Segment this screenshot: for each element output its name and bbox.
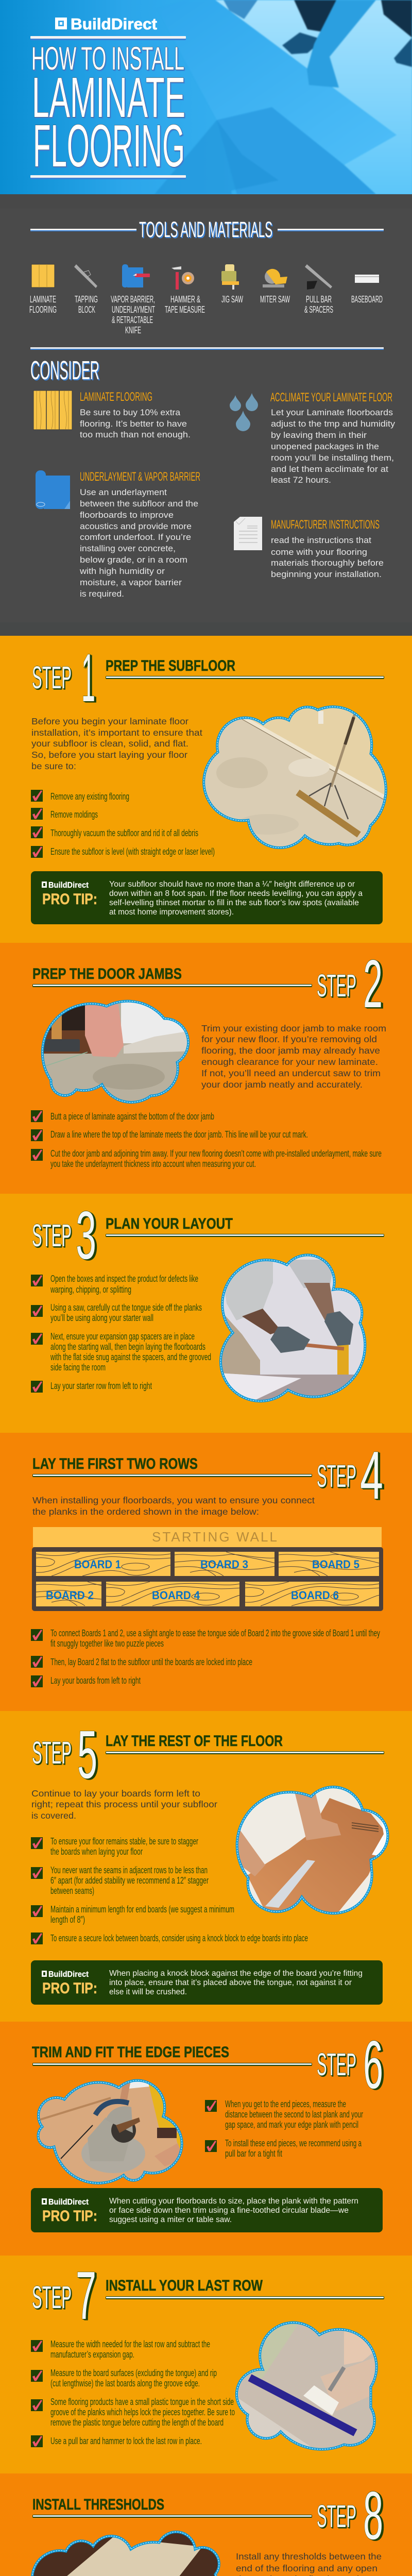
pro tip: knock block: PRO TIP:: [42, 1980, 97, 1997]
consider: underlayment and vapor barrier: installing over concrete,: [80, 544, 176, 553]
pro tip: cutting floorboards: [31, 2188, 383, 2232]
consider: laminate flooring: too much than not enough.: [80, 430, 191, 439]
step 6 badge: 6: [363, 2027, 383, 2103]
tool: tapping block: [74, 264, 98, 315]
consider: underlayment and vapor barrier: comfort underfoot. If you’re: [80, 532, 191, 542]
tool: miter saw: MITER SAW: [260, 294, 290, 304]
checklist: step 1: Ensure the subfloor is level (with straight edge or laser level): [50, 846, 215, 857]
step 3 heading: PLAN YOUR LAYOUT: [106, 1215, 233, 1232]
step 1 intro text: Before you begin your laminate floor: [31, 716, 188, 726]
tool: hammer and tape measure: TAPE MEASURE: [165, 304, 205, 315]
tool: vapor barrier, underlayment and knife: UNDERLAYMENT: [112, 304, 155, 315]
step 2 badge: STEP: [317, 968, 356, 1003]
tool: tapping block: BLOCK: [78, 304, 95, 315]
board 6: BOARD 6: [291, 1589, 339, 1602]
checklist: step 5: between seams): [50, 1886, 94, 1896]
step 2 intro text: flooring, the door jamb may already have: [201, 1045, 380, 1056]
checklist: step 3: Next, ensure your expansion gap spacers are in place: [50, 1331, 195, 1342]
step 4 heading: LAY THE FIRST TWO ROWS: [32, 1455, 198, 1472]
step 5 badge: [32, 1717, 97, 1792]
tool: baseboard: BASEBOARD: [351, 294, 383, 304]
step 3 badge: [32, 1197, 96, 1273]
checklist: step 4: Then, lay Board 2 flat to the subfloor until the boards are locked into place: [50, 1657, 252, 1667]
consider: acclimate your laminate floor: [230, 391, 396, 485]
step 5 intro text: [31, 1788, 217, 1821]
step 2 intro text: Trim your existing door jamb to make room: [201, 1023, 386, 1033]
starting wall: STARTING WALL: [152, 1529, 277, 1545]
panel: step 1: 1: [81, 640, 95, 716]
panel: step 6: [0, 2022, 412, 2256]
tool: jig saw: [221, 264, 243, 304]
heading: tools and materials: [30, 217, 384, 242]
step 8 badge: 8: [363, 2478, 383, 2553]
step 3 badge: STEP: [32, 1218, 72, 1253]
step 7 badge: [32, 2258, 96, 2333]
tool: vapor barrier, underlayment and knife: [111, 264, 155, 335]
panel: step 5: [0, 1711, 412, 2022]
step 4 intro text: the planks in the ordered shown in the image below:: [32, 1506, 259, 1517]
pro tip: subfloor height: [31, 871, 383, 924]
consider: acclimate your laminate floor: unopened packages in the: [271, 442, 379, 451]
panel: step 2: [0, 943, 412, 1194]
checklist: step 2: Butt a piece of laminate against the bottom of the door jamb: [50, 1111, 214, 1122]
step 1 intro text: [31, 716, 202, 771]
panel: step 1: [0, 636, 412, 943]
consider: acclimate your laminate floor: adjust to the tmp and humidity: [271, 419, 396, 429]
pro tip: cutting floorboards: suggest using a miter or table saw.: [109, 2215, 232, 2224]
step 5 heading: LAY THE REST OF THE FLOOR: [106, 1733, 283, 1750]
photo: sweeping the subfloor: [202, 705, 387, 849]
step 4 intro text: When installing your floorboards, you want to ensure you connect: [32, 1495, 315, 1505]
title: HOW TO INSTALL: [31, 41, 184, 77]
pro tip: knock block: else it will be crushed.: [109, 1988, 187, 1996]
tool: miter saw: [260, 269, 290, 304]
checklist: step 6: pull bar for a tight fit: [225, 2148, 282, 2159]
title: [31, 41, 185, 179]
tool: laminate flooring: [29, 264, 57, 315]
photo: threshold strip: [26, 2532, 227, 2576]
board 6: [245, 1582, 380, 1606]
pro tip: cutting floorboards: When cutting your floorboards to size, place the plank with the pattern: [109, 2197, 358, 2206]
consider: manufacturer instructions: materials thoroughly before: [271, 558, 384, 568]
step 2 intro text: enough clearance for your new laminate.: [201, 1057, 378, 1067]
step 3 badge: 3: [76, 1197, 96, 1273]
step 2 intro text: If not, you’ll need an undercut saw to trim: [201, 1068, 381, 1078]
step 4 badge: STEP: [317, 1459, 356, 1494]
checklist: step 4: [31, 1628, 380, 1687]
consider: underlayment and vapor barrier: with high humidity or: [79, 566, 165, 576]
consider: underlayment and vapor barrier: is required.: [80, 589, 124, 599]
diagram: board layout: [32, 1527, 383, 1611]
step 1 intro text: your subfloor is clean, solid, and flat.: [31, 738, 188, 749]
checklist: step 7: Measure to the board surfaces (excluding the tongue) and rip: [50, 2368, 217, 2378]
icon: water drops: [230, 393, 258, 431]
checklist: step 5: [31, 1836, 308, 1944]
step 5 intro text: Continue to lay your boards form left to: [31, 1788, 200, 1799]
checklist: step 5: Maintain a minimum length for end boards (we suggest a minimum: [50, 1904, 234, 1914]
board 4: BOARD 4: [152, 1589, 200, 1602]
checklist: step 6: [205, 2099, 363, 2159]
starting wall: [33, 1527, 382, 1547]
step 2 intro text: for your new floor. If you’re removing old: [201, 1034, 377, 1044]
checklist: step 1: [31, 790, 215, 858]
checklist: step 4: Lay your boards from left to right: [50, 1675, 141, 1686]
step 7 badge: STEP: [32, 2280, 72, 2315]
tool: vapor barrier, underlayment and knife: & RETRACTABLE: [112, 314, 153, 325]
tool: vapor barrier, underlayment and knife: KNIFE: [125, 325, 141, 335]
checklist: step 7: Use a pull bar and hammer to lock the last row in place.: [50, 2436, 202, 2446]
checklist: step 2: you take the underlayment thickness into account when measuring your cut.: [50, 1159, 256, 1169]
pro tip logo: BuildDirect: [48, 2198, 89, 2207]
board 2: [36, 1582, 136, 1606]
consider: laminate flooring: flooring. It’s better to have: [80, 419, 187, 429]
checklist: step 7: [31, 2339, 235, 2447]
board 5: BOARD 5: [312, 1558, 359, 1571]
step 1 heading: PREP THE SUBFLOOR: [106, 657, 235, 674]
checklist: step 7: Some flooring products have a small plastic tongue in the short side: [50, 2397, 234, 2407]
checklist: step 3: warping, chipping, or splitting: [50, 1284, 131, 1295]
checklist: step 6: When you get to the end pieces, measure the: [225, 2099, 346, 2109]
step 6 heading: TRIM AND FIT THE EDGE PIECES: [32, 2044, 229, 2061]
checklist: step 7: Measure the width needed for the last row and subtract the: [50, 2339, 210, 2349]
panel: step 4: [0, 1433, 412, 1711]
step 5 intro text: is covered.: [31, 1810, 76, 1821]
pro tip: subfloor height: Your subfloor should have no more than a ¼″ height difference up or: [109, 880, 355, 889]
icon: checklist document: [234, 517, 262, 550]
checklist: step 5: You never want the seams in adjacent rows to be less than: [50, 1865, 208, 1875]
photo: hammering with a pull bar: [235, 2321, 378, 2451]
step 6 badge: STEP: [317, 2047, 356, 2082]
consider: acclimate your laminate floor: least 72 hours.: [271, 475, 331, 485]
pro tip: knock block: When placing a knock block against the edge of the board you’re fitting: [109, 1969, 363, 1978]
logo: BuildDirect: [71, 15, 157, 33]
consider: manufacturer instructions: come with your flooring: [271, 547, 367, 557]
panel: step 8: [0, 2473, 412, 2576]
tool: tapping block: TAPPING: [75, 294, 98, 304]
consider: acclimate your laminate floor: Let your Laminate floorboards: [271, 408, 393, 417]
step 1 intro text: So, before you start laying your floor: [31, 750, 187, 760]
checklist: step 2: [31, 1110, 382, 1169]
step 8 heading: INSTALL THRESHOLDS: [32, 2496, 164, 2513]
consider: underlayment and vapor barrier: moisture, a vapor barrier: [80, 578, 182, 587]
checklist: step 3: Lay your starter row from left to right: [50, 1381, 152, 1391]
step 7 badge: 7: [76, 2258, 96, 2333]
board 3: [175, 1552, 275, 1576]
icon: underlayment roll: [36, 470, 70, 509]
consider: manufacturer instructions: beginning your installation.: [271, 569, 382, 579]
consider: underlayment and vapor barrier: floorboards to improve: [80, 510, 174, 520]
tool: baseboard: [351, 275, 383, 304]
photo: laying floorboards: [236, 1786, 389, 1914]
tool: laminate flooring: LAMINATE: [30, 294, 56, 304]
board 1: BOARD 1: [74, 1558, 121, 1571]
step 2 badge: 2: [363, 946, 383, 1022]
consider: acclimate your laminate floor: room you’ll be installing them,: [271, 453, 394, 463]
checklist: step 7: (cut lengthwise) the last boards along the groove edge.: [50, 2378, 200, 2388]
checklist: step 7: manufacturer’s expansion gap.: [50, 2349, 134, 2360]
pro tip: cutting floorboards: or face side down then trim using a fine-toothed circular blade—we: [109, 2206, 349, 2215]
checklist: step 3: Open the boxes and inspect the product for defects like: [50, 1274, 198, 1284]
photo: placing spacers along the wall: [219, 1253, 367, 1402]
checklist: step 7: remove the plastic tongue before cutting the length of the board: [50, 2417, 224, 2428]
board 4: [106, 1582, 241, 1606]
consider: manufacturer instructions: read the instructions that: [271, 535, 371, 545]
step 4 badge: [317, 1437, 383, 1513]
tool: hammer and tape measure: HAMMER &: [170, 294, 200, 304]
step 7 heading: INSTALL YOUR LAST ROW: [106, 2277, 263, 2294]
step 2 badge: [317, 946, 383, 1022]
checklist: step 3: you’ll be using along your starter wall: [50, 1313, 153, 1323]
board 5: [279, 1552, 379, 1576]
tool: laminate flooring: FLOORING: [29, 304, 57, 315]
checklist: step 3: Using a saw, carefully cut the tongue side off the planks: [50, 1302, 202, 1313]
checklist: step 3: side facing the room: [50, 1362, 106, 1372]
tool: jig saw: JIG SAW: [221, 294, 243, 304]
consider: underlayment and vapor barrier: [36, 470, 200, 599]
step 2 intro text: [201, 1023, 386, 1090]
tool: hammer and tape measure: [165, 266, 205, 315]
step 8 text: Install any thresholds between the: [236, 2551, 382, 2562]
photo: trimming the door jamb: [41, 999, 190, 1104]
heading: tools and materials: TOOLS AND MATERIALS: [139, 217, 272, 242]
panel: step 3: [0, 1194, 412, 1433]
checklist: step 5: the boards when laying your floor: [50, 1846, 143, 1857]
step 5 badge: STEP: [32, 1735, 72, 1770]
step 4 intro text: [32, 1495, 315, 1517]
pro tip: subfloor height: down within an 8 foot span. If the floor needs levelling, you can apply a: [109, 889, 363, 898]
checklist: step 1: Thoroughly vacuum the subfloor and rid it of all debris: [50, 828, 198, 838]
panel: tools and materials / consider: CONSIDER: [30, 355, 99, 385]
icon: wood planks: [33, 391, 72, 430]
panel: step 7: [0, 2256, 412, 2473]
step 4 badge: 4: [360, 1437, 383, 1513]
consider: underlayment and vapor barrier: between the subfloor and the: [80, 499, 198, 509]
consider: laminate flooring: [33, 390, 191, 439]
pro tip: subfloor height: self-levelling thinset mortar to fill in the sub floor’s low spots (available: [109, 899, 359, 907]
step 1 badge: STEP: [32, 660, 72, 695]
step 2 intro text: your door jamb neatly and accurately.: [201, 1079, 363, 1090]
hero banner: [0, 0, 412, 194]
step 1 intro text: be sure to:: [31, 761, 76, 771]
step 5 intro text: right; repeat this process until your subfloor: [31, 1799, 217, 1809]
tool: pull bar and spacers: [304, 264, 333, 315]
tool: pull bar and spacers: & SPACERS: [304, 304, 333, 315]
checklist: step 5: To ensure your floor remains stable, be sure to stagger: [50, 1836, 198, 1846]
tool: vapor barrier, underlayment and knife: VAPOR BARRIER,: [111, 294, 155, 304]
board 1: [36, 1552, 170, 1576]
step 2 heading: PREP THE DOOR JAMBS: [32, 965, 182, 982]
checklist: step 7: groove of the planks which helps lock the pieces together. Be sure to: [50, 2407, 235, 2417]
checklist: step 1: Remove moldings: [50, 809, 98, 820]
pro tip logo: BuildDirect: [48, 881, 89, 890]
pro tip: knock block: into place, ensure that it’s placed above the tongue, not against it or: [109, 1978, 352, 1987]
checklist: step 1: Remove any existing flooring: [50, 791, 129, 802]
checklist: step 5: 6″ apart (for added stability we recommend a 12″ stagger: [50, 1875, 209, 1886]
consider: underlayment and vapor barrier: acoustics and provide more: [80, 521, 192, 531]
checklist: step 3: with the flat side snug against the spacers, and the grooved: [50, 1352, 211, 1362]
pro tip: cutting floorboards: PRO TIP:: [42, 2208, 97, 2225]
consider: acclimate your laminate floor: and let them acclimate for at: [271, 464, 388, 474]
consider: acclimate your laminate floor: by leaving them in their: [271, 430, 367, 440]
step 5 badge: 5: [77, 1717, 97, 1792]
step 8 badge: STEP: [317, 2499, 356, 2534]
hero banner: FLOORING: [33, 112, 185, 179]
title: LAMINATE: [32, 66, 185, 129]
step 6 badge: [317, 2027, 383, 2103]
step 8 badge: [317, 2478, 383, 2553]
step 1 badge: [32, 640, 95, 716]
tool: pull bar and spacers: PULL BAR: [306, 294, 332, 304]
checklist: step 5: length of 8″): [50, 1914, 85, 1925]
consider: underlayment and vapor barrier: UNDERLAYMENT & VAPOR BARRIER: [80, 470, 200, 484]
consider: underlayment and vapor barrier: Use an underlayment: [80, 487, 167, 497]
consider: laminate flooring: Be sure to buy 10% extra: [80, 408, 181, 417]
pro tip: subfloor height: PRO TIP:: [42, 891, 97, 908]
checklist: step 3: along the starting wall, then begin laying the floorboards: [50, 1342, 205, 1352]
consider: manufacturer instructions: [234, 517, 384, 579]
checklist: step 4: fit snuggly together like two puzzle pieces: [50, 1638, 164, 1649]
checklist: step 3: [31, 1274, 211, 1393]
photo: cutting with a miter saw: [37, 2079, 183, 2184]
board 3: BOARD 3: [200, 1558, 248, 1571]
panel: tools and materials / consider: [0, 194, 412, 636]
step 1 intro text: installation, it’s important to ensure that: [31, 727, 202, 738]
hero photo: flooring planks and installer: [154, 0, 412, 194]
consider: laminate flooring: LAMINATE FLOORING: [80, 390, 152, 404]
consider: underlayment and vapor barrier: below grade, or in a room: [80, 555, 187, 565]
pro tip: knock block: [31, 1960, 383, 2005]
step 8 text: [236, 2551, 383, 2576]
pro tip: subfloor height: at most home improvement stores).: [109, 908, 234, 917]
step 8 text: end of the flooring and any open: [236, 2563, 377, 2573]
pro tip logo: BuildDirect: [48, 1970, 89, 1979]
board 2: BOARD 2: [46, 1589, 94, 1602]
